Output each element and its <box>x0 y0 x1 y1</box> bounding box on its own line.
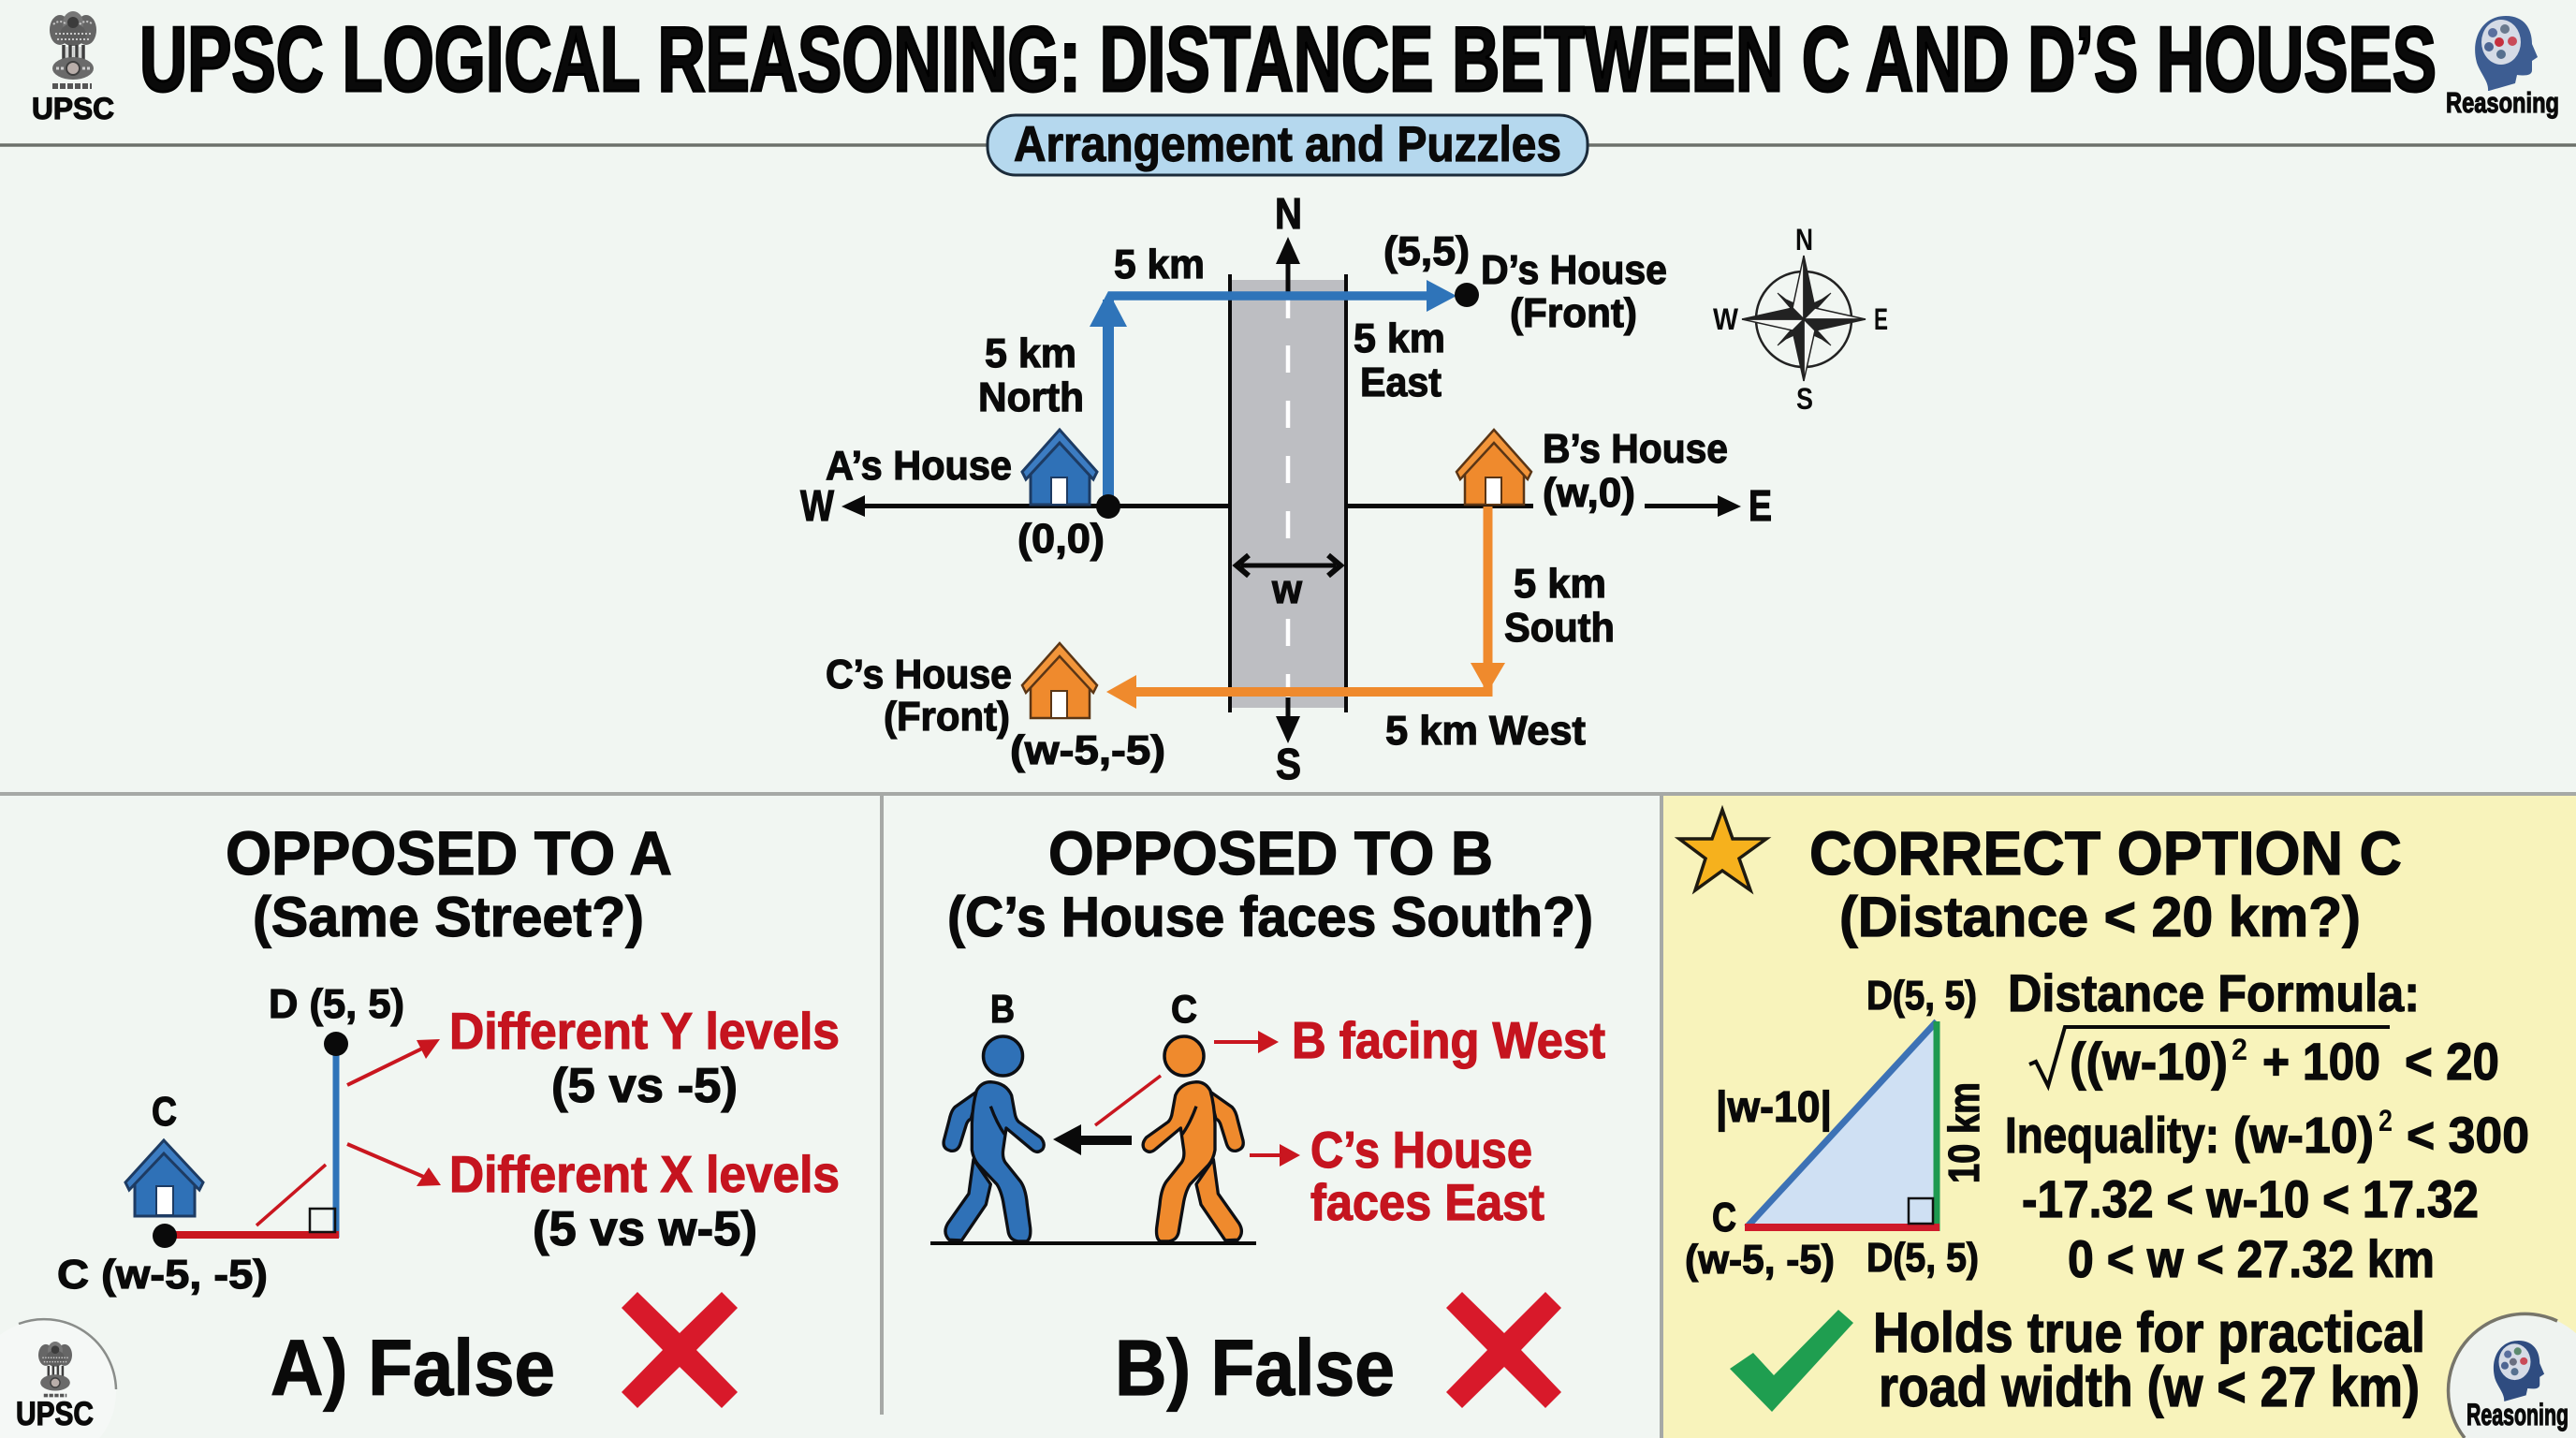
icon: red cross <box>622 1292 738 1408</box>
labels: route and house names: (0,0) <box>1017 516 1105 562</box>
diagram: right triangle: C <box>1712 1195 1736 1240</box>
labels: route and house names: 5 km <box>1514 561 1606 607</box>
diagram: right triangle: D(5, 5) <box>1866 1235 1979 1281</box>
figure: person B: B <box>990 987 1015 1031</box>
panel separator lines <box>0 794 2576 1438</box>
labels: route and house names: 5 km West <box>1385 708 1586 754</box>
labels: route and house names: 5 km <box>1114 242 1205 287</box>
formula block: Inequality: <box>2005 1108 2219 1164</box>
icon: compass rose <box>1713 223 1888 416</box>
icon: compass rose: S <box>1796 382 1813 416</box>
formula block: < 20 <box>2405 1032 2499 1091</box>
labels: route and house names: 5 km <box>985 330 1076 376</box>
verdict: B false: B) False <box>1115 1324 1395 1412</box>
labels: route and house names: East <box>1360 360 1442 405</box>
panel: opposed to B <box>930 818 1605 1412</box>
figure: person C: C <box>1171 987 1197 1031</box>
arrow: road width: w <box>1271 566 1303 612</box>
axis: west to east: W <box>800 481 834 530</box>
icon: A's house <box>1022 430 1097 505</box>
icon: compass rose: N <box>1795 223 1813 257</box>
icon: reasoning head with label <box>2446 16 2559 119</box>
callout: C's house faces east <box>1310 1121 1544 1231</box>
formula block: + 100 <box>2262 1032 2380 1091</box>
diagram: C and D levels: D (5, 5) <box>269 981 404 1027</box>
heading: (Distance < 20 km?) <box>1839 886 2361 948</box>
labels: route and house names: (w-5,-5) <box>1010 727 1165 773</box>
conclusion text <box>1873 1301 2425 1418</box>
labels: route and house names: North <box>978 374 1084 420</box>
arrow: D path north then east <box>1090 280 1456 506</box>
icon: compass rose: W <box>1713 302 1739 336</box>
arrow: to C's house faces east <box>1250 1144 1300 1167</box>
arrow: north: N <box>1275 189 1302 238</box>
heading: CORRECT OPTION C <box>1809 818 2402 888</box>
heading: (Same Street?) <box>253 886 644 948</box>
icon: B's house <box>1456 430 1531 505</box>
formula block <box>2005 963 2529 1288</box>
callout: different Y levels <box>449 1002 840 1113</box>
heading: (C’s House faces South?) <box>947 886 1593 948</box>
diagram: right triangle: |w-10| <box>1716 1082 1832 1131</box>
callout: different Y levels: Different Y levels <box>449 1002 840 1060</box>
labels: route and house names: D’s House <box>1481 247 1667 293</box>
axis: west to east: E <box>1749 481 1772 530</box>
labels: route and house names <box>826 228 1728 773</box>
arrow: south: S <box>1276 740 1301 788</box>
diagram: C and D levels: C (w-5, -5) <box>57 1252 268 1298</box>
figure: person B <box>944 987 1044 1241</box>
arrow: road width <box>1237 555 1340 612</box>
formula block: 0 < w < 27.32 km <box>2068 1229 2435 1288</box>
labels: route and house names: (w,0) <box>1543 470 1635 516</box>
panel: correct option C <box>1679 810 2529 1418</box>
diagram: right triangle: 10 km <box>1939 1082 1988 1183</box>
callout: different X levels: (5 vs w-5) <box>533 1202 757 1256</box>
axis: west to east <box>800 481 1772 530</box>
badge: UPSC lower left: UPSC <box>16 1396 94 1432</box>
callout: different Y levels: (5 vs -5) <box>551 1059 738 1113</box>
conclusion text: road width (w < 27 km) <box>1879 1356 2420 1418</box>
heading <box>947 818 1593 948</box>
ground line <box>930 1241 1256 1245</box>
diagram: right triangle <box>1685 973 1988 1283</box>
icon: red cross <box>1446 1292 1561 1408</box>
diagram: C and D levels: C <box>152 1089 177 1135</box>
figure: person C <box>1143 987 1243 1241</box>
heading: OPPOSED TO B <box>1048 818 1493 888</box>
badge: UPSC lower left <box>0 1319 116 1438</box>
header divider line <box>0 143 2576 147</box>
arrow: to different Y levels <box>347 1039 440 1085</box>
diagram: C and D levels <box>57 981 404 1298</box>
chart: coordinate map of houses and road <box>800 189 1772 788</box>
labels: route and house names: 5 km <box>1354 315 1445 361</box>
icon: green check <box>1730 1310 1853 1412</box>
arrow: south <box>1276 697 1301 788</box>
conclusion text: Holds true for practical <box>1873 1301 2425 1364</box>
icon: UPSC emblem with label: UPSC <box>32 92 114 125</box>
diagram: right triangle: (w-5, -5) <box>1685 1237 1835 1283</box>
labels: route and house names: C’s House <box>826 652 1012 697</box>
road <box>1230 274 1346 712</box>
arrow: facing west <box>1053 1124 1132 1155</box>
icon: UPSC emblem with label <box>32 11 114 125</box>
formula block: 2 <box>2378 1104 2393 1137</box>
point: D <box>1455 283 1479 307</box>
icon: star <box>1679 810 1766 890</box>
verdict: A false: A) False <box>271 1324 555 1412</box>
arrow: north <box>1275 189 1302 292</box>
subtitle pill: Arrangement and Puzzles <box>1014 117 1561 172</box>
formula block: (w-10) <box>2233 1108 2374 1164</box>
heading <box>226 818 672 948</box>
labels: route and house names: (5,5) <box>1383 228 1470 274</box>
arrow: to B facing west <box>1214 1031 1279 1053</box>
panel: opposed to A <box>57 818 840 1412</box>
callout: C's house faces east: C’s House <box>1310 1121 1532 1179</box>
labels: route and house names: (Front) <box>884 694 1010 740</box>
callout: C's house faces east: faces East <box>1310 1173 1544 1231</box>
callout: different X levels <box>449 1145 840 1256</box>
heading: OPPOSED TO A <box>226 818 672 888</box>
arrow: C path south then west <box>1106 506 1505 709</box>
labels: route and house names: A’s House <box>826 443 1012 489</box>
arrow: to different X levels <box>347 1144 441 1186</box>
labels: route and house names: South <box>1504 605 1615 651</box>
pointer line <box>1095 1076 1161 1125</box>
callout: different X levels: Different X levels <box>449 1145 840 1203</box>
diagram: right triangle: D(5, 5) <box>1866 973 1977 1019</box>
icon: compass rose: E <box>1874 302 1888 336</box>
formula block: -17.32 < w-10 < 17.32 <box>2022 1169 2479 1228</box>
point: A <box>1096 494 1120 519</box>
panel: correct option background <box>1662 796 2576 1438</box>
badge: reasoning lower right <box>2448 1313 2576 1438</box>
labels: route and house names: B’s House <box>1543 426 1728 472</box>
formula block: ((w-10) <box>2070 1032 2228 1091</box>
heading <box>1809 818 2402 948</box>
formula block: 2 <box>2232 1033 2247 1066</box>
icon: C's house <box>1022 643 1097 718</box>
labels: route and house names: (Front) <box>1510 290 1637 336</box>
formula block: < 300 <box>2407 1108 2529 1164</box>
callout: B facing west: B facing West <box>1292 1011 1605 1069</box>
formula block: Distance Formula: <box>2008 963 2420 1022</box>
